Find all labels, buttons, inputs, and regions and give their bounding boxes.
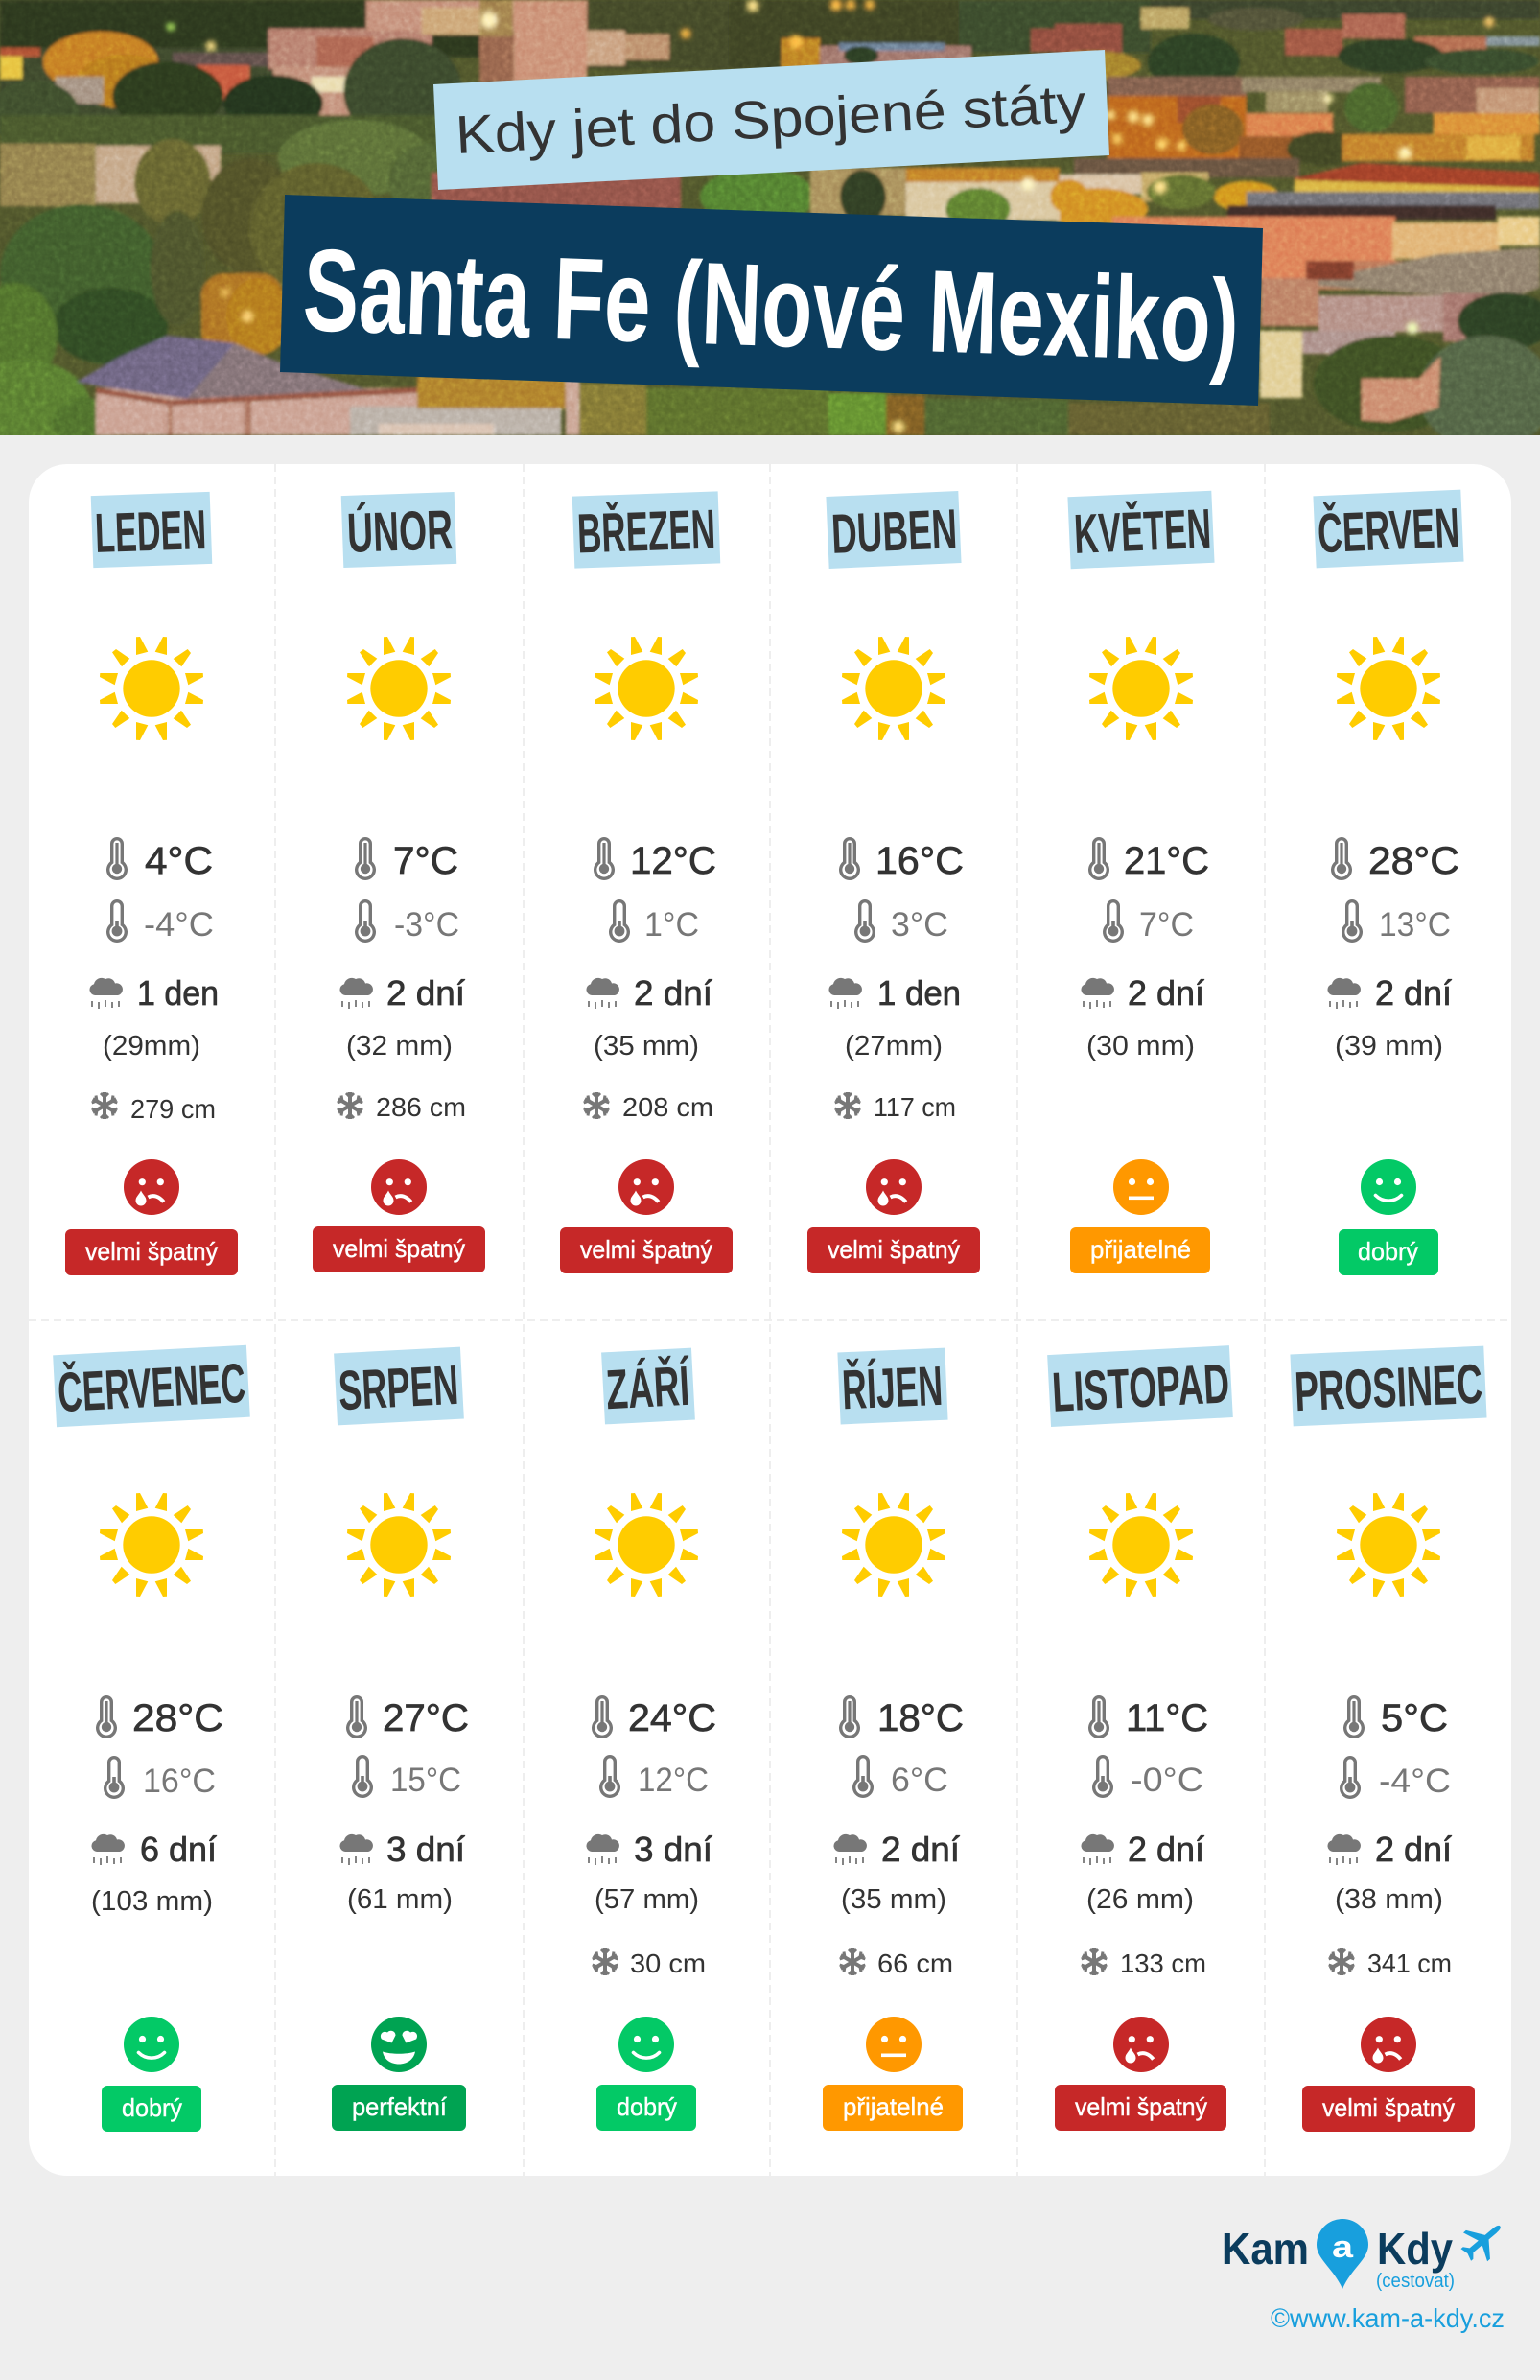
rain days: 3 dní: [386, 1830, 465, 1869]
rating badge: [1302, 2086, 1475, 2132]
month: Březen: [560, 491, 733, 1273]
high temperature: [839, 1695, 964, 1739]
rain days: 6 dní: [140, 1830, 217, 1869]
low temperature: [352, 1755, 461, 1799]
low temperature: [106, 899, 214, 944]
website credit: ©www.kam-a-kdy.cz: [1271, 2303, 1505, 2333]
icon: sun: [1337, 1493, 1440, 1597]
month: Únor: [313, 492, 485, 1272]
snowfall: 117 cm: [874, 1092, 956, 1122]
high temperature: 24°C: [628, 1697, 716, 1739]
rainfall: (103 mm): [91, 1886, 213, 1917]
month label: [1067, 491, 1215, 569]
rating badge: perfektní: [352, 2092, 448, 2121]
low temperature: [609, 899, 699, 944]
rainfall: (30 mm): [1086, 1031, 1195, 1062]
high temperature: 16°C: [875, 840, 964, 882]
high temperature: 11°C: [1126, 1697, 1208, 1739]
low temperature: 1°C: [644, 906, 699, 944]
icon: sun: [842, 1493, 945, 1597]
low temperature: 16°C: [143, 1762, 216, 1800]
rating badge: [313, 1226, 485, 1272]
icon: sun: [347, 1493, 451, 1597]
rainfall: (38 mm): [1335, 1884, 1443, 1915]
month label: LEDEN: [94, 499, 207, 565]
month label: DUBEN: [830, 498, 958, 566]
rating badge: přijatelné: [1090, 1235, 1191, 1264]
right middle lit buildings: [1108, 96, 1247, 158]
high temperature: 28°C: [132, 1697, 223, 1739]
rain days: 2 dní: [1128, 1830, 1204, 1869]
rain days: [1327, 1830, 1452, 1869]
high temperature: [592, 1695, 716, 1739]
snowfall: [92, 1092, 216, 1124]
rating smiley: [1361, 2017, 1416, 2072]
snowfall: 133 cm: [1120, 1948, 1206, 1978]
rain days: [91, 1830, 217, 1869]
month label: KVĚTEN: [1073, 498, 1212, 566]
high temperature: [839, 837, 964, 882]
icon: sun: [1337, 637, 1440, 740]
snowfall: [1082, 1948, 1206, 1978]
snowfall: 279 cm: [130, 1094, 216, 1124]
rating smiley: [124, 1159, 179, 1215]
month: Prosinec: [1290, 1346, 1487, 2132]
far hillside: [0, 0, 518, 58]
rain days: [833, 1830, 960, 1869]
month label: BŘEZEN: [576, 499, 716, 565]
month label: LISTOPAD: [1051, 1352, 1231, 1424]
low temperature: [355, 899, 459, 944]
month: Září: [586, 1348, 716, 2131]
low temperature: 15°C: [390, 1762, 461, 1799]
rainfall: (57 mm): [595, 1884, 699, 1915]
icon: sun: [595, 1493, 698, 1597]
rainfall: (26 mm): [1086, 1884, 1194, 1915]
rating badge: dobrý: [617, 2092, 677, 2121]
rain days: 2 dní: [881, 1830, 960, 1869]
month: Duben: [807, 491, 980, 1273]
low temperature: [852, 1755, 948, 1799]
rating smiley: [866, 1159, 922, 1215]
rain days: [1327, 973, 1452, 1013]
snowfall: [840, 1948, 953, 1978]
rain days: 2 dní: [386, 973, 465, 1013]
rating badge: velmi špatný: [580, 1235, 712, 1264]
icon: sun: [1089, 637, 1193, 740]
high temperature: 18°C: [877, 1697, 964, 1739]
rain days: 2 dní: [1375, 973, 1452, 1013]
high temperature: [594, 837, 716, 882]
snowfall: [584, 1092, 713, 1122]
month label: [601, 1348, 695, 1424]
rainfall: (61 mm): [347, 1884, 453, 1915]
rating badge: velmi špatný: [85, 1237, 218, 1266]
month: Srpen: [332, 1347, 469, 2131]
snowfall: [1329, 1948, 1452, 1978]
high temperature: 21°C: [1124, 840, 1209, 882]
snowfall: [338, 1092, 466, 1122]
rating badge: velmi špatný: [1322, 2093, 1455, 2122]
logo: Kam a Kdy: [1222, 2212, 1512, 2292]
rating badge: velmi špatný: [828, 1235, 960, 1264]
rating badge: dobrý: [1358, 1237, 1418, 1266]
rating badge: dobrý: [122, 2093, 182, 2122]
right lower buildings: [1112, 217, 1395, 280]
low temperature: [104, 1756, 216, 1800]
low temperature: [1340, 1756, 1451, 1800]
month label: [1047, 1345, 1233, 1427]
snowfall: [593, 1948, 706, 1978]
snowfall: 66 cm: [877, 1948, 953, 1978]
low temperature: -4°C: [1379, 1762, 1451, 1800]
low temperature: [1342, 899, 1451, 944]
month label: [572, 491, 720, 569]
low temperature: [854, 899, 948, 944]
month label: [1313, 490, 1464, 568]
high temperature: [355, 837, 458, 882]
month label: [91, 492, 212, 568]
rainfall: (29mm): [103, 1031, 200, 1062]
rain days: [1081, 1830, 1204, 1869]
rating badge: [1339, 1229, 1438, 1275]
logo: Kam a Kdy: Kam: [1222, 2224, 1309, 2274]
high temperature: [1331, 837, 1459, 882]
rating badge: [807, 1227, 980, 1273]
left mid: [0, 115, 441, 153]
rainfall: (35 mm): [594, 1031, 699, 1062]
rain days: [586, 973, 712, 1013]
month label: ÚNOR: [346, 499, 454, 565]
rating badge: [596, 2085, 696, 2131]
low temperature: 3°C: [891, 906, 948, 944]
icon: sun: [595, 637, 698, 740]
month label: [837, 1348, 948, 1424]
rating badge: [102, 2086, 201, 2132]
icon: map pin: a: [1332, 2229, 1353, 2264]
month label: ZÁŘÍ: [604, 1355, 692, 1421]
rainfall: (32 mm): [346, 1031, 453, 1062]
icon: map pin: [1317, 2219, 1368, 2289]
high temperature: 7°C: [393, 840, 458, 882]
month: Říjen: [823, 1348, 964, 2131]
low temperature: 12°C: [638, 1762, 709, 1799]
snowfall: [835, 1092, 956, 1122]
rating badge: [65, 1229, 238, 1275]
month label: SRPEN: [337, 1354, 460, 1422]
low temperature: [1103, 899, 1194, 944]
high temperature: 5°C: [1381, 1697, 1448, 1739]
rainfall: (35 mm): [841, 1884, 946, 1915]
rating smiley: [371, 1159, 427, 1215]
high temperature: 12°C: [630, 840, 716, 882]
bottom-left building: [96, 388, 422, 435]
rating smiley: [618, 1159, 674, 1215]
month label: [341, 492, 456, 568]
rain days: 2 dní: [1128, 973, 1204, 1013]
rating smiley: [124, 2017, 179, 2072]
logo: Kam a Kdy: (cestovat): [1376, 2271, 1455, 2292]
high temperature: 28°C: [1368, 840, 1459, 882]
rain days: 1 den: [877, 973, 961, 1013]
rain days: [339, 973, 465, 1013]
icon: sun: [100, 637, 203, 740]
rating badge: [560, 1227, 733, 1273]
rating badge: [332, 2085, 466, 2131]
rain days: 2 dní: [634, 973, 712, 1013]
low temperature: 7°C: [1139, 906, 1194, 944]
rain days: [89, 973, 219, 1013]
rating smiley: [618, 2017, 674, 2072]
snowfall: 208 cm: [622, 1092, 713, 1122]
low temperature: [599, 1755, 709, 1799]
title banner: [280, 195, 1263, 406]
rain days: 3 dní: [634, 1830, 712, 1869]
high temperature: [96, 1695, 223, 1739]
low temperature: -0°C: [1131, 1762, 1203, 1799]
month label: [826, 491, 962, 569]
header photo: Santa Fe at dusk: [0, 0, 1540, 455]
month label: ŘÍJEN: [841, 1355, 944, 1421]
rating badge: [1070, 1227, 1210, 1273]
panel: calendar card: [29, 464, 1511, 2176]
logo: Kam a Kdy: Kdy: [1377, 2224, 1453, 2274]
low temperature: 13°C: [1379, 906, 1451, 944]
high temperature: [1088, 1695, 1208, 1739]
rating smiley: [371, 2017, 427, 2072]
rating smiley: [1113, 2017, 1169, 2072]
rain days: 1 den: [137, 973, 219, 1013]
banner gap strip: [432, 173, 681, 209]
rating smiley: [1361, 1159, 1416, 1215]
rating smiley: [1113, 1159, 1169, 1215]
rating badge: [823, 2085, 963, 2131]
icon: sun: [1089, 1493, 1193, 1597]
subtitle banner: [433, 50, 1109, 190]
left upper: [0, 48, 278, 153]
icon: sun: [842, 637, 945, 740]
month: Listopad: [1047, 1345, 1233, 2131]
subtitle banner: Kdy jet do Spojené státy: [454, 73, 1087, 165]
big green tree: [0, 204, 163, 342]
month label: [334, 1347, 464, 1425]
orange glow: [201, 273, 283, 355]
rain days: [339, 1830, 465, 1869]
rain days: [828, 973, 961, 1013]
snowfall: 30 cm: [630, 1948, 706, 1978]
high temperature: [1343, 1695, 1448, 1739]
high temperature: 27°C: [383, 1697, 469, 1739]
rating badge: [1055, 2085, 1226, 2131]
rain days: [1081, 973, 1204, 1013]
right top: [1141, 8, 1189, 29]
month label: [53, 1345, 250, 1427]
month label: ČERVENEC: [57, 1352, 247, 1424]
tower and top middle: [479, 35, 518, 82]
icon: sun: [100, 1493, 203, 1597]
high temperature: [1088, 837, 1209, 882]
month: Květen: [1067, 491, 1215, 1273]
month: Červen: [1313, 490, 1464, 1275]
rain days: 2 dní: [1375, 1830, 1452, 1869]
high temperature: 4°C: [145, 840, 213, 882]
rain days: [586, 1830, 712, 1869]
high temperature: [106, 837, 213, 882]
icon: plane: [1454, 2212, 1512, 2269]
rating badge: přijatelné: [843, 2092, 944, 2121]
high temperature: [346, 1695, 469, 1739]
rating badge: velmi špatný: [333, 1234, 465, 1263]
rating smiley: [866, 2017, 922, 2072]
low temperature: -4°C: [144, 906, 214, 944]
rainfall: (27mm): [845, 1031, 943, 1062]
month: Červenec: [53, 1345, 250, 2132]
dusk lights: [167, 0, 1494, 432]
icon: sun: [347, 637, 451, 740]
rating badge: velmi špatný: [1075, 2092, 1207, 2121]
month: Leden: [65, 492, 238, 1275]
low temperature: [1092, 1755, 1203, 1799]
rainfall: (39 mm): [1335, 1031, 1443, 1062]
snowfall: 286 cm: [376, 1092, 466, 1122]
snowfall: 341 cm: [1367, 1948, 1452, 1978]
low temperature: -3°C: [394, 906, 459, 944]
low temperature: 6°C: [891, 1762, 948, 1799]
